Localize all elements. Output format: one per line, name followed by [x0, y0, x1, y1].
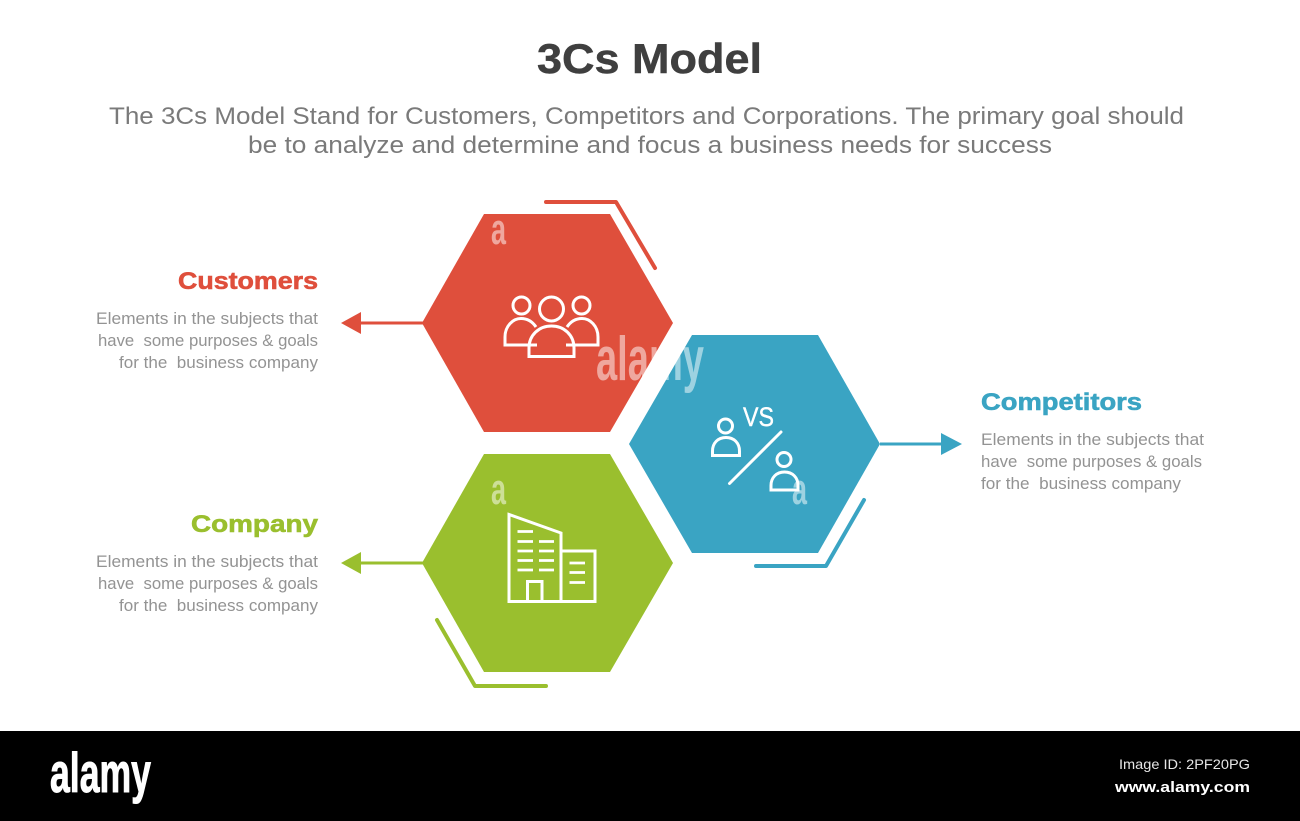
hexagon shape: customers [422, 214, 673, 432]
icon: office buildings [509, 514, 595, 602]
text block: customers: Elements in the subjects that [96, 309, 318, 328]
panel: competitors hexagon [629, 335, 880, 566]
watermark overlay [491, 205, 807, 514]
website: www.alamy.com [1114, 779, 1250, 796]
icon: three people [505, 297, 598, 356]
text block: competitors: for the business company [981, 474, 1181, 493]
arrow: competitors [880, 433, 962, 455]
footer bar [0, 731, 1300, 821]
title: 3Cs Model [537, 35, 762, 82]
icon: person versus person [712, 402, 798, 490]
hexagon shape: company [422, 454, 673, 672]
text block: competitors: have some purposes & goals [981, 452, 1202, 471]
accent stroke: company [437, 620, 546, 686]
image id: Image ID: 2PF20PG [1119, 756, 1250, 772]
subtitle text: be to analyze and determine and focus a business needs for success [248, 132, 1052, 159]
text block: competitors: Elements in the subjects that [981, 430, 1204, 449]
text block: customers: for the business company [119, 353, 318, 372]
text block: company: for the business company [119, 596, 318, 615]
panel: company hexagon [422, 454, 673, 686]
panel: customers hexagon [422, 202, 673, 432]
text block: customers [96, 309, 318, 372]
accent stroke: competitors [756, 500, 864, 566]
icon: person versus person: VS [743, 402, 774, 432]
watermark overlay: a [491, 205, 506, 254]
arrow: customers [341, 312, 423, 334]
watermark overlay: a [792, 465, 807, 514]
accent stroke: customers [546, 202, 655, 268]
footer logo: alamy [50, 741, 151, 804]
watermark overlay: a [491, 465, 506, 514]
text block: customers: have some purposes & goals [98, 331, 318, 350]
heading: customers: Customers [178, 268, 318, 295]
subtitle text [109, 103, 1184, 159]
text block: company: have some purposes & goals [98, 574, 318, 593]
heading: company: Company [191, 511, 319, 538]
text block: company: Elements in the subjects that [96, 552, 318, 571]
hexagon shape: competitors [629, 335, 880, 553]
text block: competitors [981, 430, 1204, 493]
text block: company [96, 552, 318, 615]
heading: competitors: Competitors [981, 389, 1142, 416]
arrow: company [341, 552, 423, 574]
watermark overlay: alamy [596, 325, 704, 394]
subtitle text: The 3Cs Model Stand for Customers, Competitors and Corporations. The primary goal should [109, 103, 1184, 130]
